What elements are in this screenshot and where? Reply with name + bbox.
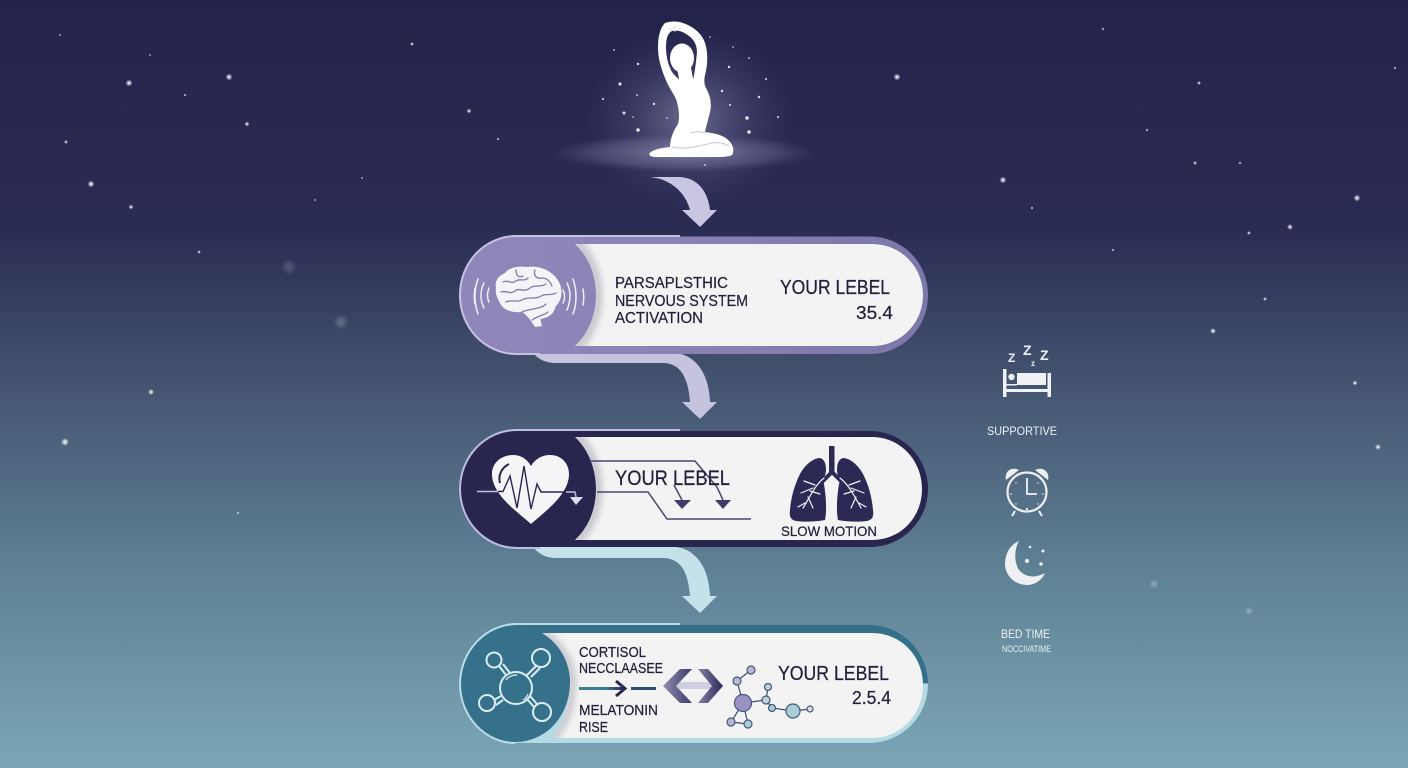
icon: crescent moon with stars [1005,541,1045,585]
stretching figure with glow [552,22,816,208]
text: cortisol necclaasee: CORTISOL [579,645,646,661]
icon: bed [1003,369,1051,397]
text: melatonin rise [579,703,658,736]
right column: sleep cues [987,342,1057,654]
icon: sleeping zzz [1008,342,1049,368]
text: cortisol necclaasee: NECCLAASEE [579,661,663,677]
icon: molecular network [727,666,813,728]
label: supportive: SUPPORTIVE [987,424,1057,438]
text: level value 2.5.4: 2.5.4 [852,688,891,708]
text: cortisol necclaasee [579,645,663,677]
icon: sleeping zzz: Z [1008,351,1015,365]
text: level value 2.5.4 [778,663,891,708]
text: level value 35.4: 35.4 [856,303,893,323]
text: level value 2.5.4: YOUR LEBEL [778,663,889,685]
arrow: panel 2 to panel 3 [533,547,717,613]
text: level value 35.4 [780,277,893,323]
label: bed time: NOCCIVATIME [1002,644,1051,654]
arrow: cortisol to melatonin [579,681,656,696]
icon: sleeping zzz: z [1031,359,1035,368]
text: melatonin rise: MELATONIN [579,703,658,719]
text: nervous system activation: PARSAPLSTHIC [615,275,728,292]
background stars [59,28,1396,615]
icon: heart with pulse [477,455,583,524]
text: level value 35.4: YOUR LEBEL [780,277,890,299]
icon: sleeping zzz: Z [1040,347,1049,363]
icon: sleeping zzz: Z [1023,342,1032,358]
icon: lungs [790,446,873,522]
flow lines with arrows [590,461,751,519]
text: your level: YOUR LEBEL [615,467,730,490]
label: bed time: BED TIME [1001,629,1050,641]
text: nervous system activation [615,275,748,327]
text: nervous system activation: ACTIVATION [615,310,703,327]
arrow: figure to panel 1 [650,177,717,227]
panel 1: parasympathetic activation [459,236,928,354]
panel 3: cortisol and melatonin [459,624,928,743]
text: slow motion: SLOW MOTION [781,523,877,539]
icon: alarm clock [1006,469,1048,516]
text: melatonin rise: RISE [579,720,608,736]
icon: double-headed arrow [663,669,723,703]
icon: molecule [479,649,551,721]
label: bed time [1001,629,1051,654]
text: nervous system activation: NERVOUS SYSTEM [615,293,748,310]
arrow: panel 1 to panel 2 [533,353,717,419]
panel 2: heart rate and breathing [459,430,928,548]
icon: brain [474,267,584,327]
